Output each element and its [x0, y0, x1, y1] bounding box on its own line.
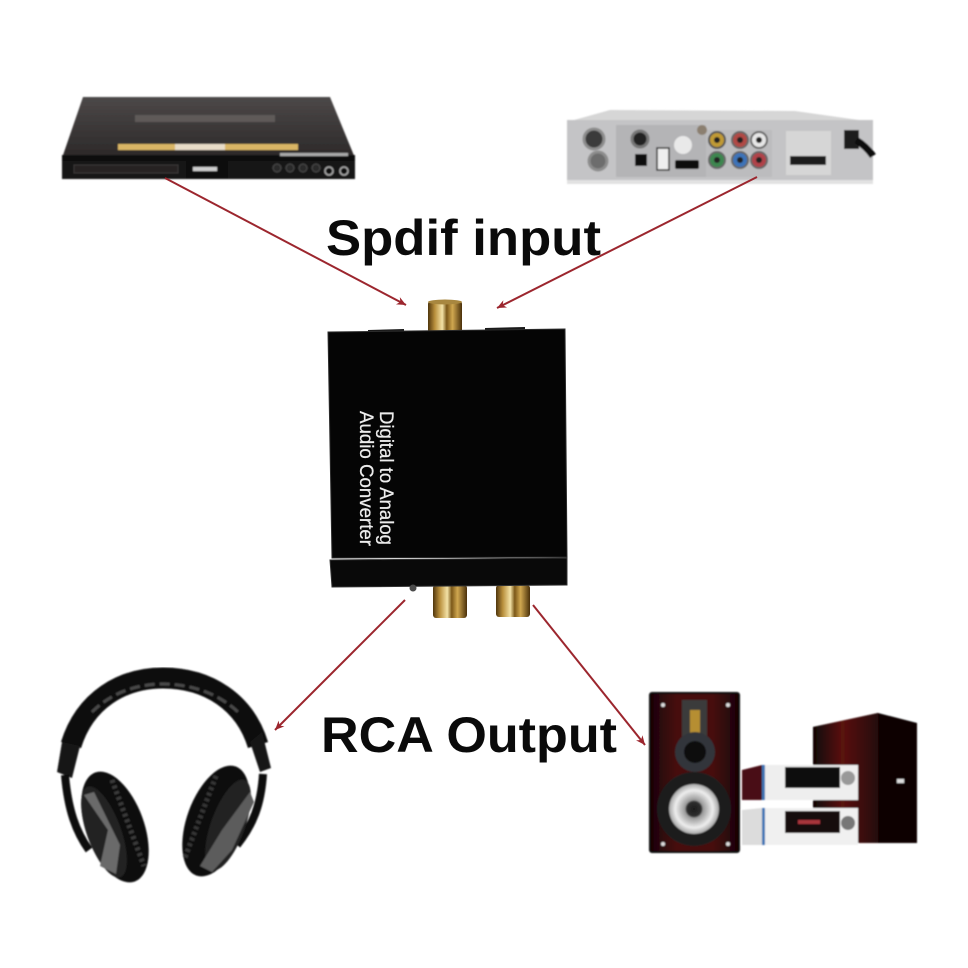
heading: Spdif input: Spdif input — [326, 210, 601, 266]
bottom gold RCA connectors — [433, 585, 530, 618]
device label text: Digital to Analog — [375, 411, 396, 545]
arrow: converter to headphones — [275, 600, 405, 730]
bookshelf speaker — [650, 693, 739, 852]
device: digital to analog converter — [328, 300, 567, 618]
arrow: set-top box to converter — [497, 177, 757, 308]
heading: RCA Output: RCA Output — [321, 707, 617, 763]
arrow: converter to speakers — [533, 605, 645, 745]
icon: DVD player — [62, 97, 355, 179]
subwoofer speaker — [813, 713, 917, 843]
arrow: DVD player to converter — [165, 178, 406, 305]
icon: speakers and stereo system — [650, 693, 917, 852]
device label text — [355, 411, 396, 547]
top gold RCA connector — [428, 300, 462, 333]
device label text: Audio Converter — [355, 411, 376, 547]
icon: headphones — [57, 678, 271, 891]
icon: set-top box rear — [567, 110, 873, 184]
stereo units — [742, 765, 858, 845]
